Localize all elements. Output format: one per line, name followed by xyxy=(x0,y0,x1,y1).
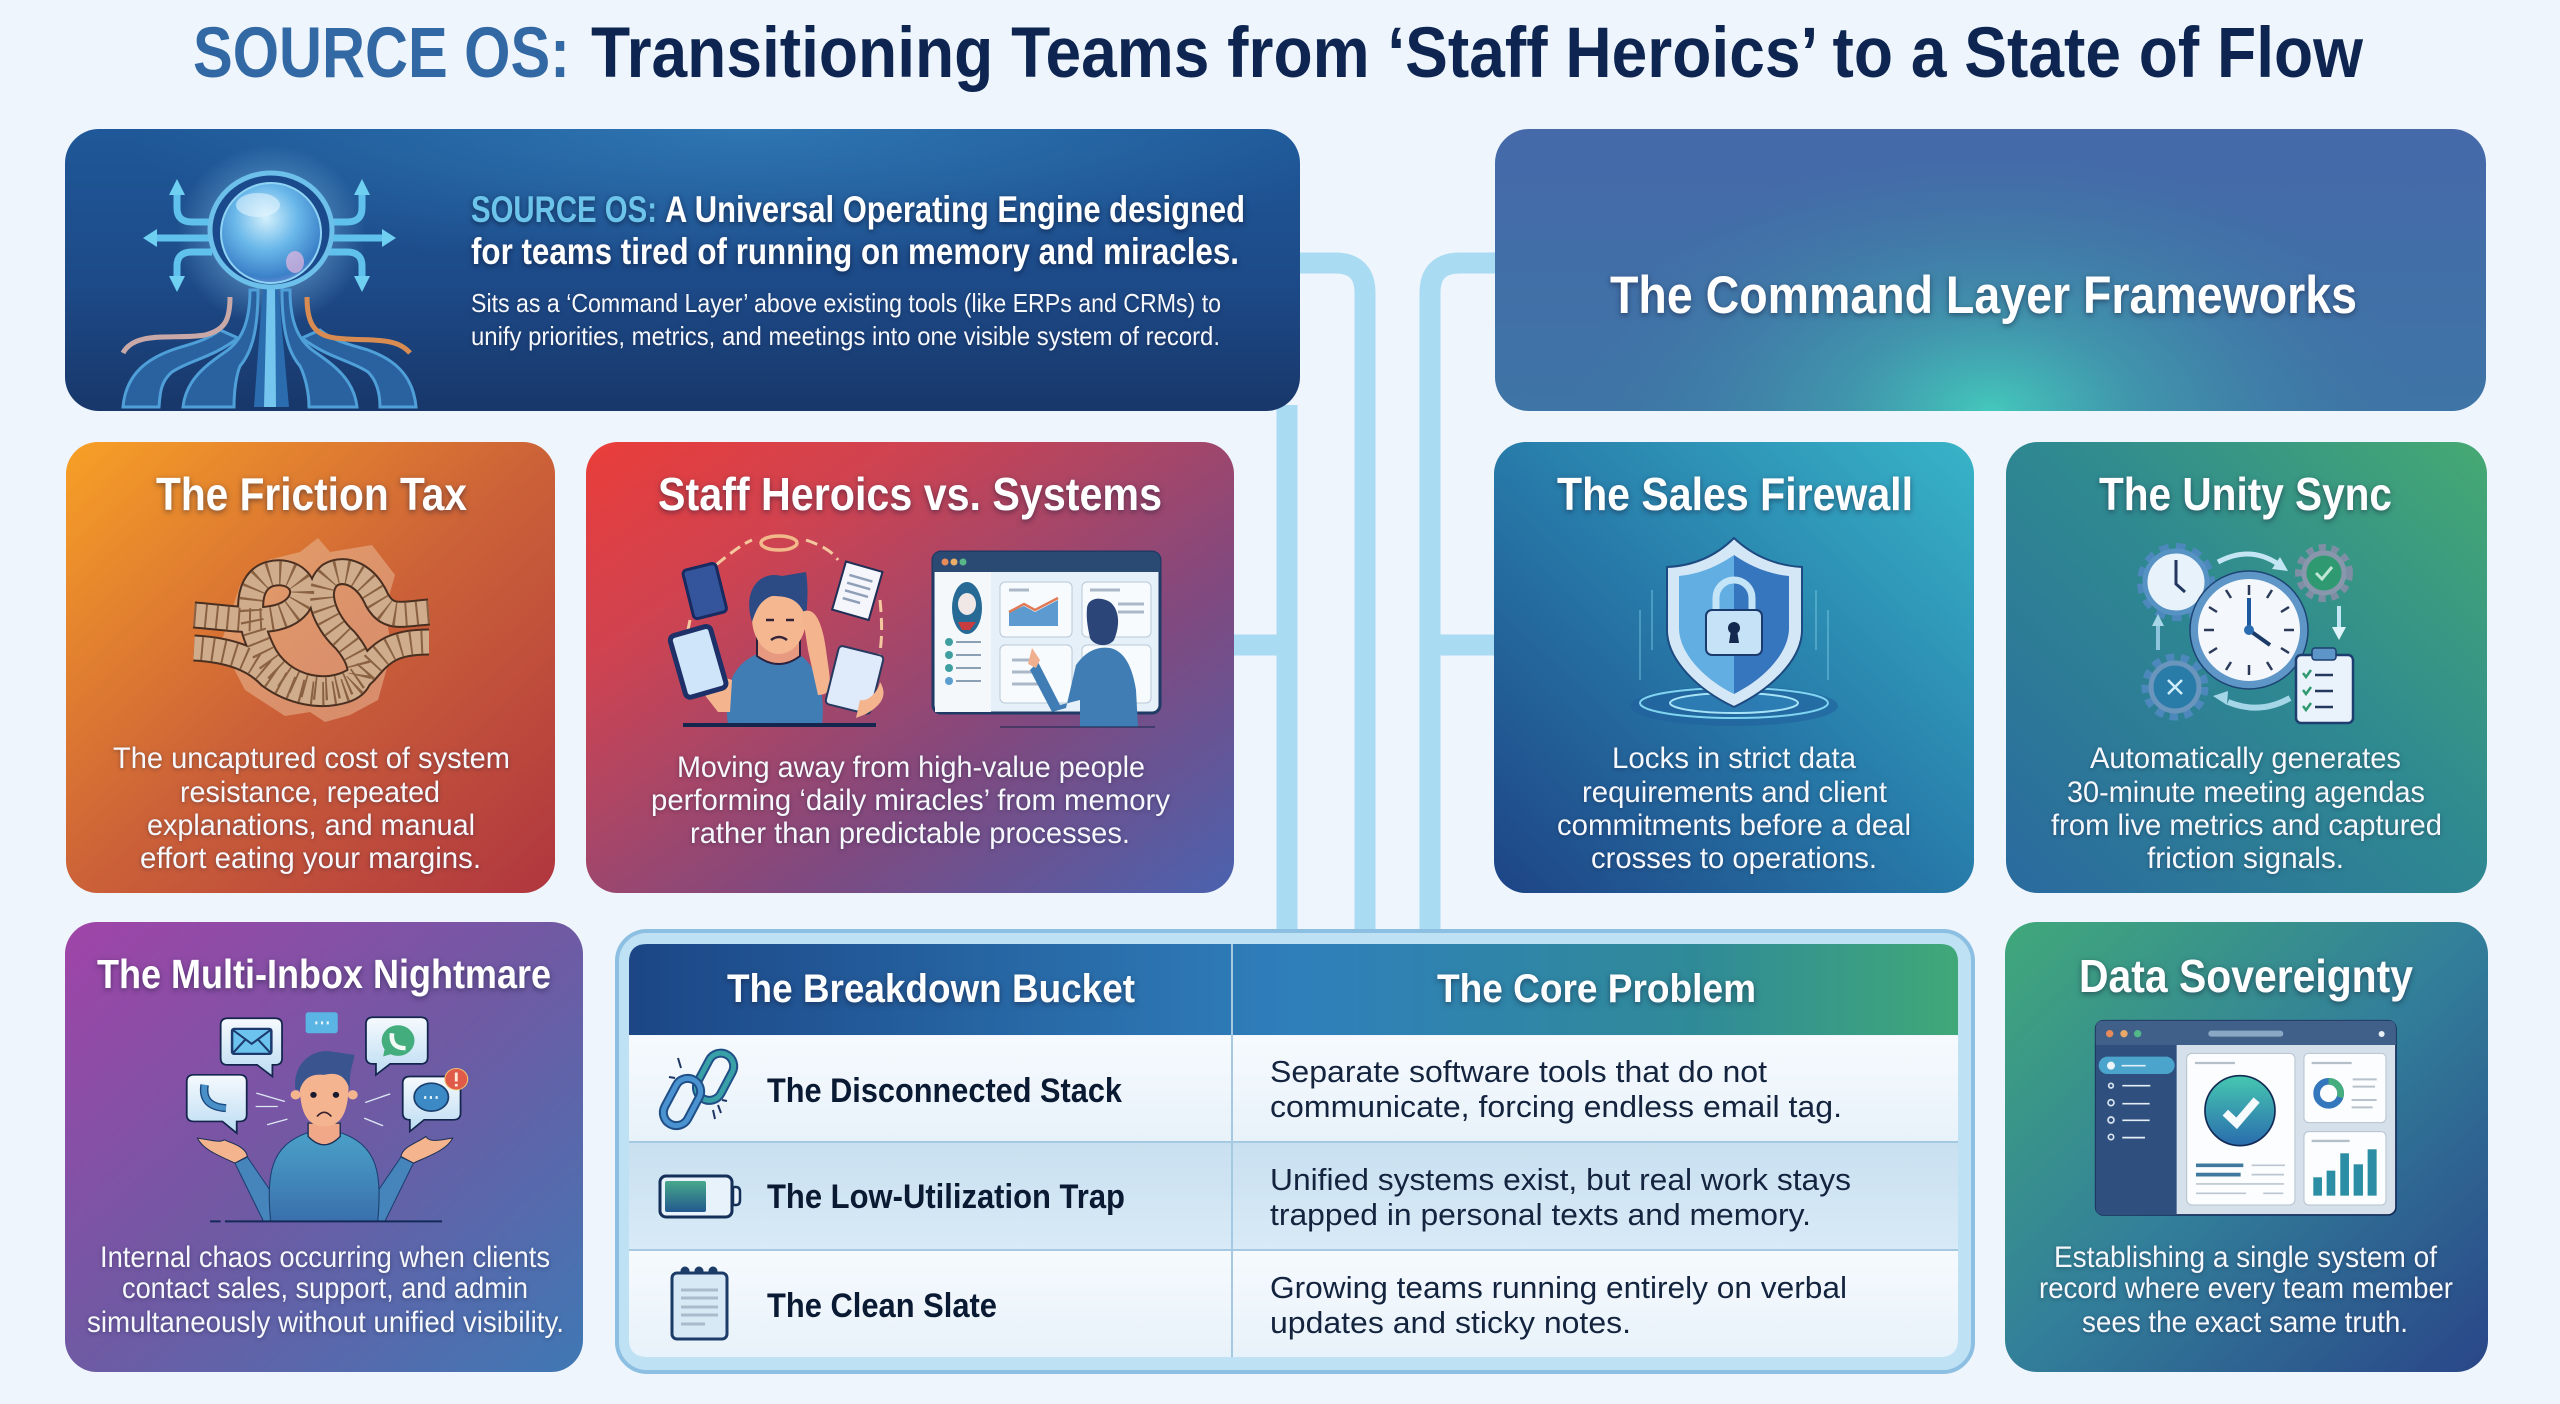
panel: the multi-inbox nightmare xyxy=(65,922,583,1372)
card body text: Moving away from high-value people xyxy=(677,751,1145,784)
card body text xyxy=(651,751,1170,850)
card body text xyxy=(1557,742,1911,875)
row: the clean slate xyxy=(672,1268,1847,1340)
card body text: crosses to operations. xyxy=(1591,842,1877,875)
card body text: Establishing a single system of xyxy=(2054,1241,2438,1274)
panel: the command layer frameworks xyxy=(1495,129,2486,411)
panel: source os overview xyxy=(65,129,1300,411)
card body text: Internal chaos occurring when clients xyxy=(100,1241,550,1274)
row: the clean slate: updates and sticky notes. xyxy=(1270,1305,1631,1340)
card body text: record where every team member xyxy=(2039,1272,2453,1305)
card heading: The Unity Sync xyxy=(2099,468,2392,520)
title: SOURCE OS: xyxy=(193,14,570,93)
hero description: Sits as a ‘Command Layer’ above existing tools (like ERPs and CRMs) to xyxy=(471,288,1221,318)
card body text: Locks in strict data xyxy=(1612,742,1856,775)
illustration: overwhelmed person juggling devices xyxy=(669,536,884,725)
icon: knotted rope xyxy=(194,538,429,722)
row: the low-utilization trap: trapped in personal texts and memory. xyxy=(1270,1197,1811,1232)
table header row: The Core Problem xyxy=(1437,967,1756,1011)
panel heading: The Command Layer Frameworks xyxy=(1610,266,2357,325)
row: the low-utilization trap: Unified systems exist, but real work stays xyxy=(1270,1162,1851,1197)
table header row: The Breakdown Bucket xyxy=(727,967,1135,1011)
icon: clock, gears and clipboard cycle xyxy=(2142,548,2353,723)
hero heading: for teams tired of running on memory and miracles. xyxy=(471,231,1239,272)
panel: the sales firewall xyxy=(1494,442,1974,893)
card body text xyxy=(113,742,510,875)
card body text: sees the exact same truth. xyxy=(2082,1306,2408,1339)
row: the disconnected stack: Separate software tools that do not xyxy=(1270,1054,1767,1089)
title: Transitioning Teams from ‘Staff Heroics’ to a State of Flow xyxy=(591,14,2364,93)
panel: the friction tax xyxy=(66,442,555,893)
panel: the unity sync xyxy=(2006,442,2487,893)
card body text: 30-minute meeting agendas xyxy=(2067,776,2425,809)
table: breakdown bucket vs core problem xyxy=(617,931,1973,1372)
card body text: contact sales, support, and admin xyxy=(122,1272,528,1305)
row: the clean slate: The Clean Slate xyxy=(767,1287,997,1325)
illustration: person at system dashboard xyxy=(933,552,1160,727)
card body text xyxy=(87,1241,564,1339)
card heading: Staff Heroics vs. Systems xyxy=(658,468,1162,520)
row: the disconnected stack: communicate, forcing endless email tag. xyxy=(1270,1089,1842,1124)
card body text: commitments before a deal xyxy=(1557,809,1911,842)
card body text: rather than predictable processes. xyxy=(690,817,1130,850)
card body text: effort eating your margins. xyxy=(140,842,481,875)
hero description xyxy=(471,288,1221,351)
hero description: unify priorities, metrics, and meetings into one visible system of record. xyxy=(471,321,1220,351)
panel: data sovereignty xyxy=(2005,922,2488,1372)
row: the clean slate: Growing teams running entirely on verbal xyxy=(1270,1270,1847,1305)
card body text xyxy=(2039,1241,2453,1339)
row: the low-utilization trap xyxy=(660,1162,1851,1232)
hero heading: A Universal Operating Engine designed xyxy=(665,189,1245,230)
connector lines between panels xyxy=(1230,263,1500,940)
card body text: from live metrics and captured xyxy=(2051,809,2442,842)
row: the disconnected stack xyxy=(659,1049,1842,1130)
card heading: The Sales Firewall xyxy=(1557,468,1913,520)
icon: broken chain link xyxy=(659,1049,738,1130)
card body text: simultaneously without unified visibility. xyxy=(87,1306,564,1339)
icon: central engine sphere with routed arrows xyxy=(123,145,416,407)
card body text: The uncaptured cost of system xyxy=(113,742,510,775)
card heading: The Friction Tax xyxy=(156,468,467,520)
row: the disconnected stack: The Disconnected Stack xyxy=(767,1072,1122,1110)
card body text: resistance, repeated xyxy=(180,776,440,809)
card body text xyxy=(2051,742,2442,875)
panel: staff heroics vs. systems xyxy=(586,442,1234,893)
icon: shield with padlock xyxy=(1630,538,1838,726)
card heading: The Multi-Inbox Nightmare xyxy=(97,951,551,997)
card body text: explanations, and manual xyxy=(147,809,475,842)
table header row xyxy=(629,944,1958,1035)
illustration: person surrounded by message bubbles xyxy=(187,1012,468,1221)
illustration: dashboard window with check mark xyxy=(2096,1021,2396,1215)
hero heading xyxy=(471,189,1245,272)
card body text: requirements and client xyxy=(1582,776,1888,809)
card body text: performing ‘daily miracles’ from memory xyxy=(651,784,1170,817)
icon: notepad xyxy=(672,1268,727,1339)
hero heading: SOURCE OS: xyxy=(471,189,657,230)
card body text: Automatically generates xyxy=(2090,742,2401,775)
card heading: Data Sovereignty xyxy=(2079,950,2413,1002)
icon: low battery xyxy=(660,1176,740,1217)
card body text: friction signals. xyxy=(2147,842,2344,875)
row: the low-utilization trap: The Low-Utilization Trap xyxy=(767,1178,1125,1216)
